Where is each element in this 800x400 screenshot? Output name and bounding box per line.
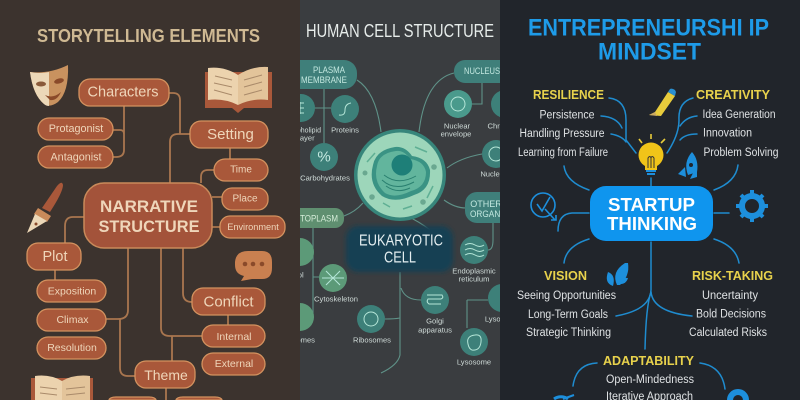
node: Narrative Structure: NARRATIVE	[100, 198, 198, 216]
node: Antagonist: Antagonist	[50, 152, 102, 164]
node: Startup Thinking: THINKING	[607, 214, 697, 234]
node: Plasma Membrane: MEMBRANE	[301, 75, 347, 85]
node: External: External	[215, 358, 253, 370]
item: right lysosome	[485, 284, 519, 324]
node: Nucleus: NUCLEUS	[464, 66, 500, 76]
node: Time	[214, 159, 268, 181]
node: Cytoplasm: CYTOPLASM	[289, 214, 338, 224]
node: Resolution: Resolution	[47, 342, 97, 354]
item: carbohydrates	[300, 143, 350, 182]
item: green ribosomes	[277, 303, 315, 344]
group: vision	[517, 268, 616, 339]
icon: gear	[736, 190, 768, 222]
icon: open book top	[205, 67, 272, 113]
node: Other Organelles	[465, 192, 500, 223]
item: endoplasmic reticulum: reticulum	[459, 274, 489, 284]
item: cytosol: Cytosol	[278, 270, 304, 280]
group: creativity: CREATIVITY	[696, 87, 770, 102]
icon: theatre mask	[30, 65, 68, 106]
node: Environment: Environment	[227, 222, 279, 232]
icon: rocket	[678, 152, 697, 179]
item: proteins: Proteins	[331, 126, 359, 134]
node: Plasma Membrane	[300, 60, 357, 89]
icon: fountain pen	[27, 183, 63, 233]
item: chromatin	[488, 91, 500, 128]
group: adaptability	[603, 353, 694, 400]
group: vision: Strategic Thinking	[526, 327, 611, 339]
item: nuclear envelope	[441, 90, 472, 138]
item: phospholipid bilayer: Phospholipid	[281, 126, 321, 134]
node: Environment	[220, 216, 285, 238]
node: Plasma Membrane: PLASMA	[313, 65, 345, 75]
icon: target check	[531, 193, 556, 220]
node: Theme: Theme	[144, 367, 188, 383]
panel: storytelling elements	[0, 0, 300, 400]
node: Theme	[135, 361, 195, 388]
group: risk-taking	[689, 268, 773, 339]
node: Place	[222, 188, 268, 210]
node: Internal: Internal	[216, 331, 252, 343]
node: Place: Place	[232, 194, 258, 204]
item: chromatin: Chromatin	[487, 122, 523, 130]
node: Protagonist: Protagonist	[49, 123, 103, 135]
label: eukaryotic cell: EUKARYOTIC	[359, 232, 443, 250]
group: resilience: Learning from Failure	[518, 147, 608, 159]
item: right lysosome: Lysosome	[485, 314, 519, 324]
blurred glow behind eukaryotic cell label	[346, 226, 453, 272]
item: endoplasmic reticulum: Endoplasmic	[452, 266, 496, 276]
node: Plot: Plot	[42, 249, 68, 265]
item: golgi apparatus: apparatus	[418, 326, 452, 334]
group: risk-taking: Bold Decisions	[696, 308, 766, 320]
node: cut-off right sub-theme	[176, 397, 222, 400]
group: vision: VISION	[544, 268, 587, 283]
node: Other Organelles: ORGANELLES	[470, 209, 526, 219]
item: nuclear envelope: envelope	[441, 130, 471, 138]
heading: storytelling elements: STORYTELLING ELEMENTS	[37, 26, 260, 46]
group: creativity: Idea Generation	[702, 109, 776, 121]
icon: speech bubble	[235, 251, 272, 281]
heading: human cell structure: HUMAN CELL STRUCTURE	[306, 21, 494, 41]
node: Exposition	[37, 280, 106, 302]
item: ribosomes: Ribosomes	[353, 336, 391, 344]
node: Internal	[202, 325, 265, 347]
group: creativity: Problem Solving	[704, 147, 778, 159]
diagram: eukaryotic cell	[354, 129, 446, 221]
group: vision: Seeing Opportunities	[517, 290, 616, 302]
group: risk-taking: Uncertainty	[702, 290, 758, 302]
connector lines	[55, 93, 230, 400]
node: External	[202, 353, 265, 375]
node: Cytoplasm	[300, 208, 344, 228]
icon: pencil	[649, 89, 676, 116]
connector lines	[300, 73, 493, 373]
icon: light bulb	[638, 134, 665, 175]
node: Conflict	[192, 288, 265, 315]
item: phospholipid bilayer: Bilayer	[291, 134, 315, 142]
group: resilience: RESILIENCE	[533, 87, 604, 102]
node: Characters	[79, 79, 169, 106]
node: Resolution	[37, 337, 106, 359]
group: adaptability: ADAPTABILITY	[603, 353, 694, 368]
node: Time: Time	[230, 164, 252, 176]
node: Plot	[27, 243, 81, 270]
node: Narrative Structure	[84, 183, 212, 248]
label: eukaryotic cell	[359, 232, 443, 266]
item: golgi apparatus: Golgi	[426, 316, 444, 326]
item: endoplasmic reticulum	[452, 236, 496, 284]
item: phospholipid bilayer	[300, 94, 321, 142]
group: risk-taking: RISK-TAKING	[692, 268, 773, 283]
item: golgi apparatus	[418, 286, 452, 334]
item: cytosol	[278, 238, 314, 280]
group: resilience: Handling Pressure	[520, 128, 604, 140]
item: ribosomes	[353, 305, 391, 344]
item: cytoskeleton	[314, 264, 358, 304]
label: eukaryotic cell: CELL	[384, 250, 416, 266]
node: Narrative Structure: STRUCTURE	[98, 218, 200, 236]
item: proteins	[331, 95, 359, 134]
node: Protagonist	[38, 118, 113, 140]
node: Other Organelles: OTHER	[470, 199, 502, 209]
group: risk-taking: Calculated Risks	[689, 327, 767, 339]
icon: sprout leaf	[607, 263, 628, 286]
node: Exposition: Exposition	[48, 286, 96, 298]
heading: entrepreneurship mindset: ENTREPRENEURSHI IP	[528, 14, 769, 42]
node: Setting	[190, 121, 268, 148]
node: Startup Thinking	[590, 186, 713, 241]
panel: human cell structure	[300, 0, 500, 400]
group: resilience	[518, 87, 608, 159]
group: creativity	[696, 87, 778, 159]
item: cytoskeleton: Cytoskeleton	[314, 294, 358, 304]
node: Climax: Climax	[56, 314, 89, 326]
node: Conflict: Conflict	[203, 294, 254, 310]
node: Startup Thinking: STARTUP	[608, 195, 695, 215]
item: nuclear envelope: Nuclear	[444, 122, 471, 130]
node: Setting: Setting	[207, 126, 254, 143]
icon: gear bottom	[730, 392, 746, 400]
item: carbohydrates: %	[317, 148, 331, 166]
group: vision: Long-Term Goals	[528, 309, 608, 321]
group: adaptability: Open-Mindedness	[606, 374, 694, 386]
item: green ribosomes: Ribosomes	[277, 336, 315, 344]
heading: entrepreneurship mindset: MINDSET	[598, 38, 701, 66]
node: Climax	[37, 309, 106, 331]
icon: open book bottom	[31, 376, 93, 400]
item: nucleolus: Nucleolus	[480, 170, 514, 178]
icon: target bottom	[554, 395, 574, 399]
node: Characters: Characters	[88, 84, 158, 100]
node: cut-off left sub-theme	[109, 397, 156, 400]
group: resilience: Persistence	[540, 110, 594, 122]
connector lines	[558, 98, 739, 389]
item: lysosome	[457, 328, 491, 366]
item: carbohydrates: Carbohydrates	[300, 174, 350, 182]
node: Nucleus	[454, 60, 500, 83]
node: Antagonist	[38, 146, 113, 168]
panel: entrepreneurship mindset	[500, 0, 800, 400]
item: lysosome: Lysosome	[457, 358, 491, 366]
heading: entrepreneurship mindset	[528, 14, 769, 66]
group: creativity: Innovation	[703, 128, 752, 140]
item: nucleolus	[481, 140, 500, 176]
